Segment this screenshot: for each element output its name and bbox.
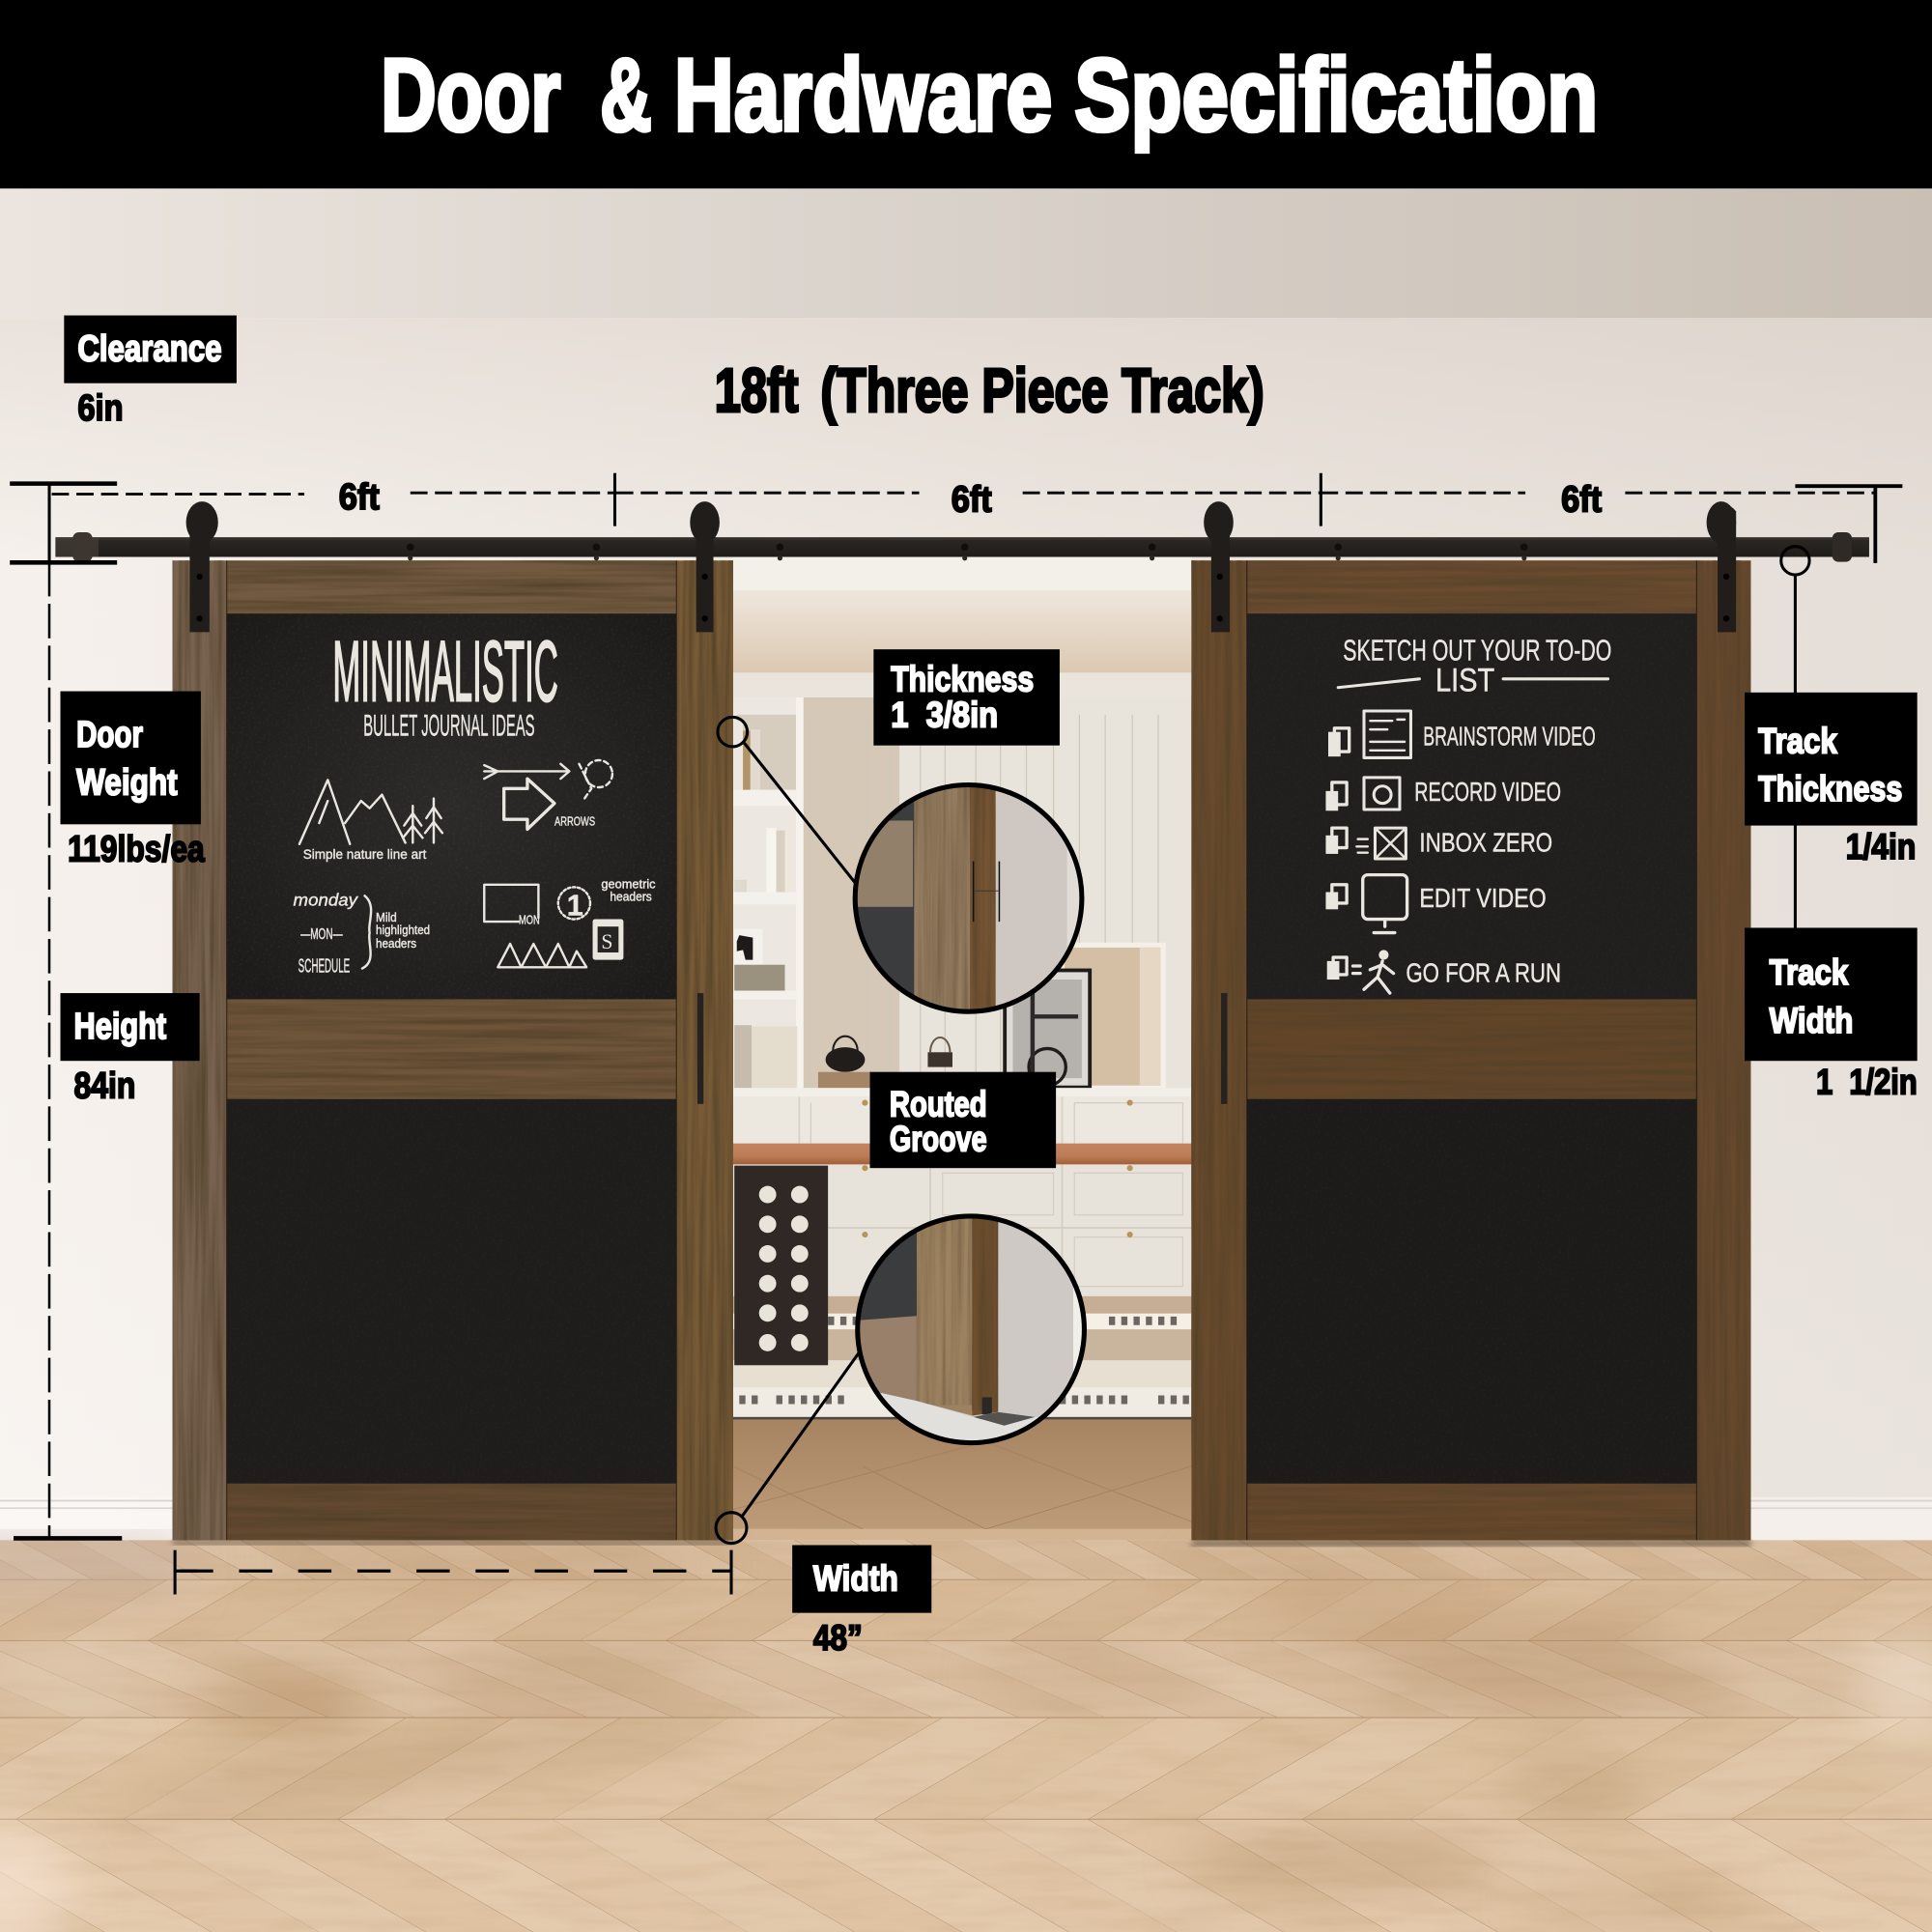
- left door handle: [697, 993, 703, 1104]
- bookshelf: [733, 697, 804, 1090]
- chalk list: record video: [1325, 777, 1561, 810]
- chalk drawing: mountains and trees: Simple nature line art: [303, 846, 426, 862]
- room background: wall: [0, 318, 1932, 1540]
- clearance label: 6in: [77, 387, 124, 429]
- door floor shadows: [173, 1540, 1751, 1547]
- chalk drawing: arrows: [484, 760, 612, 829]
- chalk heading: to-do list: [1338, 635, 1611, 699]
- chalk heading: to-do list: SKETCH OUT YOUR TO-DO: [1343, 635, 1611, 668]
- hanger 3: [1204, 501, 1234, 632]
- paneled back wall: [804, 697, 1191, 1090]
- thickness label: [873, 649, 1060, 746]
- chalk list: edit video: EDIT VIDEO: [1419, 883, 1547, 913]
- chalk drawing: mountains and trees: [299, 780, 442, 862]
- track thickness label: Thickness: [1758, 769, 1902, 809]
- chalk drawing: geometric headers: MON: [519, 913, 540, 927]
- chalk drawing: geometric headers: headers: [610, 889, 652, 903]
- left door: [173, 560, 733, 1540]
- segment label 3: 6ft: [1561, 478, 1602, 520]
- track thickness label: Track: [1758, 721, 1837, 760]
- clearance label: Clearance: [77, 328, 222, 370]
- track width label: Track: [1770, 952, 1849, 992]
- chalk heading: to-do list: LIST: [1435, 663, 1494, 699]
- barn door track: [55, 532, 1869, 562]
- track hangers: [186, 501, 1736, 632]
- routed groove label: Groove: [890, 1119, 987, 1158]
- right door upper chalkboard: [1247, 613, 1696, 999]
- chalk drawing: geometric headers: [484, 877, 656, 967]
- title bar: Specification: [1074, 37, 1598, 153]
- track thickness label: [1745, 693, 1918, 867]
- routed groove label: [870, 1072, 1056, 1168]
- left door upper chalkboard: [227, 613, 676, 999]
- segment label 1: 6ft: [339, 476, 380, 518]
- left door lower chalkboard: [227, 1099, 676, 1484]
- chalk drawing: geometric headers: S: [601, 930, 613, 953]
- track width label: [1745, 927, 1918, 1102]
- routed groove label: Routed: [890, 1085, 987, 1124]
- heading: track length: 18ft: [715, 355, 799, 425]
- herringbone wood floor: [0, 1529, 1932, 1932]
- chalk list: go for a run: GO FOR A RUN: [1406, 958, 1561, 988]
- chalk drawing: schedule headers: highlighted: [376, 923, 430, 937]
- hanger 2: [690, 501, 720, 632]
- title bar: [0, 0, 1932, 188]
- perforated desk leg: [734, 1166, 828, 1365]
- track dimension line with 6ft segments: [52, 473, 1875, 526]
- clearance bracket and door height line: [10, 483, 122, 1538]
- kettles and art on the shelf: [818, 943, 1166, 1090]
- hanger 1: [186, 501, 218, 632]
- left door upper chalkboard: MINIMALISTIC: [332, 623, 558, 720]
- width label: Width: [813, 1559, 898, 1599]
- chalk list: record video: RECORD VIDEO: [1414, 777, 1561, 807]
- thickness label: 1 3/8in: [891, 696, 998, 735]
- interior floor and rug: [733, 1296, 1191, 1529]
- chalk drawing: schedule headers: [294, 891, 430, 977]
- right door lower chalkboard: [1247, 1099, 1696, 1484]
- door width dimension: [175, 1550, 731, 1595]
- door weight label: [60, 692, 205, 870]
- door weight label: Door: [76, 714, 143, 755]
- title bar: &: [600, 37, 652, 153]
- right door handle: [1221, 993, 1227, 1104]
- height label: 84in: [74, 1065, 135, 1106]
- books and shelf objects: [734, 721, 797, 1090]
- chalk drawing: geometric headers: geometric: [601, 877, 656, 892]
- chalk drawing: schedule headers: headers: [376, 936, 416, 951]
- right door: [1191, 560, 1750, 1540]
- chalk list: brainstorm video: [1328, 711, 1596, 757]
- chalk list: edit video: [1325, 875, 1547, 933]
- desk cabinets: [733, 1088, 1191, 1296]
- heading: track length: [715, 355, 1264, 425]
- track thickness pointer: [1781, 547, 1809, 927]
- height label: Height: [74, 1006, 166, 1047]
- left door frame rails and stiles: [173, 560, 733, 1540]
- routed groove pointer line and marker: [716, 1353, 859, 1544]
- chalk list: inbox zero: [1325, 827, 1552, 859]
- segment label 2: 6ft: [952, 478, 992, 520]
- right door frame rails and stiles: [1191, 560, 1750, 1540]
- room seen through the opening: [733, 557, 1191, 1529]
- chalk drawing: schedule headers: SCHEDULE: [298, 955, 350, 977]
- track width label: Width: [1770, 1001, 1853, 1040]
- chalk drawing: geometric headers: 1: [567, 890, 583, 923]
- width label: 48”: [813, 1618, 863, 1658]
- chalk drawing: schedule headers: monday: [294, 890, 358, 909]
- heading: track length: (Three Piece Track): [820, 355, 1264, 425]
- right track end bracket: [1795, 486, 1902, 563]
- thickness label: Thickness: [891, 660, 1034, 699]
- chalk heading: minimalistic: [332, 623, 558, 742]
- chalk drawing: arrows: ARROWS: [554, 814, 595, 829]
- chalk drawing: schedule headers: —MON—: [300, 926, 343, 943]
- thickness detail circle: [850, 782, 1096, 1016]
- hanger 4: [1707, 501, 1736, 632]
- door weight label: Weight: [76, 762, 178, 804]
- chalk drawing: schedule headers: Mild: [376, 910, 397, 924]
- height label: [60, 993, 200, 1106]
- routed groove detail circle: [850, 1213, 1096, 1448]
- floor shadows and light patches: [0, 1540, 1932, 1932]
- title bar: Hardware: [674, 37, 1052, 153]
- chalk heading: minimalistic: BULLET JOURNAL IDEAS: [363, 707, 535, 742]
- chalk list: brainstorm video: BRAINSTORM VIDEO: [1423, 722, 1596, 752]
- track thickness label: 1/4in: [1846, 827, 1916, 867]
- thickness detail: pointer line and marker: [718, 717, 858, 886]
- width label: [792, 1545, 931, 1658]
- room background: ceiling: [0, 188, 1932, 318]
- chalk list: inbox zero: INBOX ZERO: [1419, 827, 1552, 857]
- door weight label: 119lbs/ea: [68, 829, 205, 870]
- chalk list: go for a run: [1327, 950, 1561, 993]
- clearance label: [64, 316, 237, 429]
- title bar: Door: [381, 37, 560, 153]
